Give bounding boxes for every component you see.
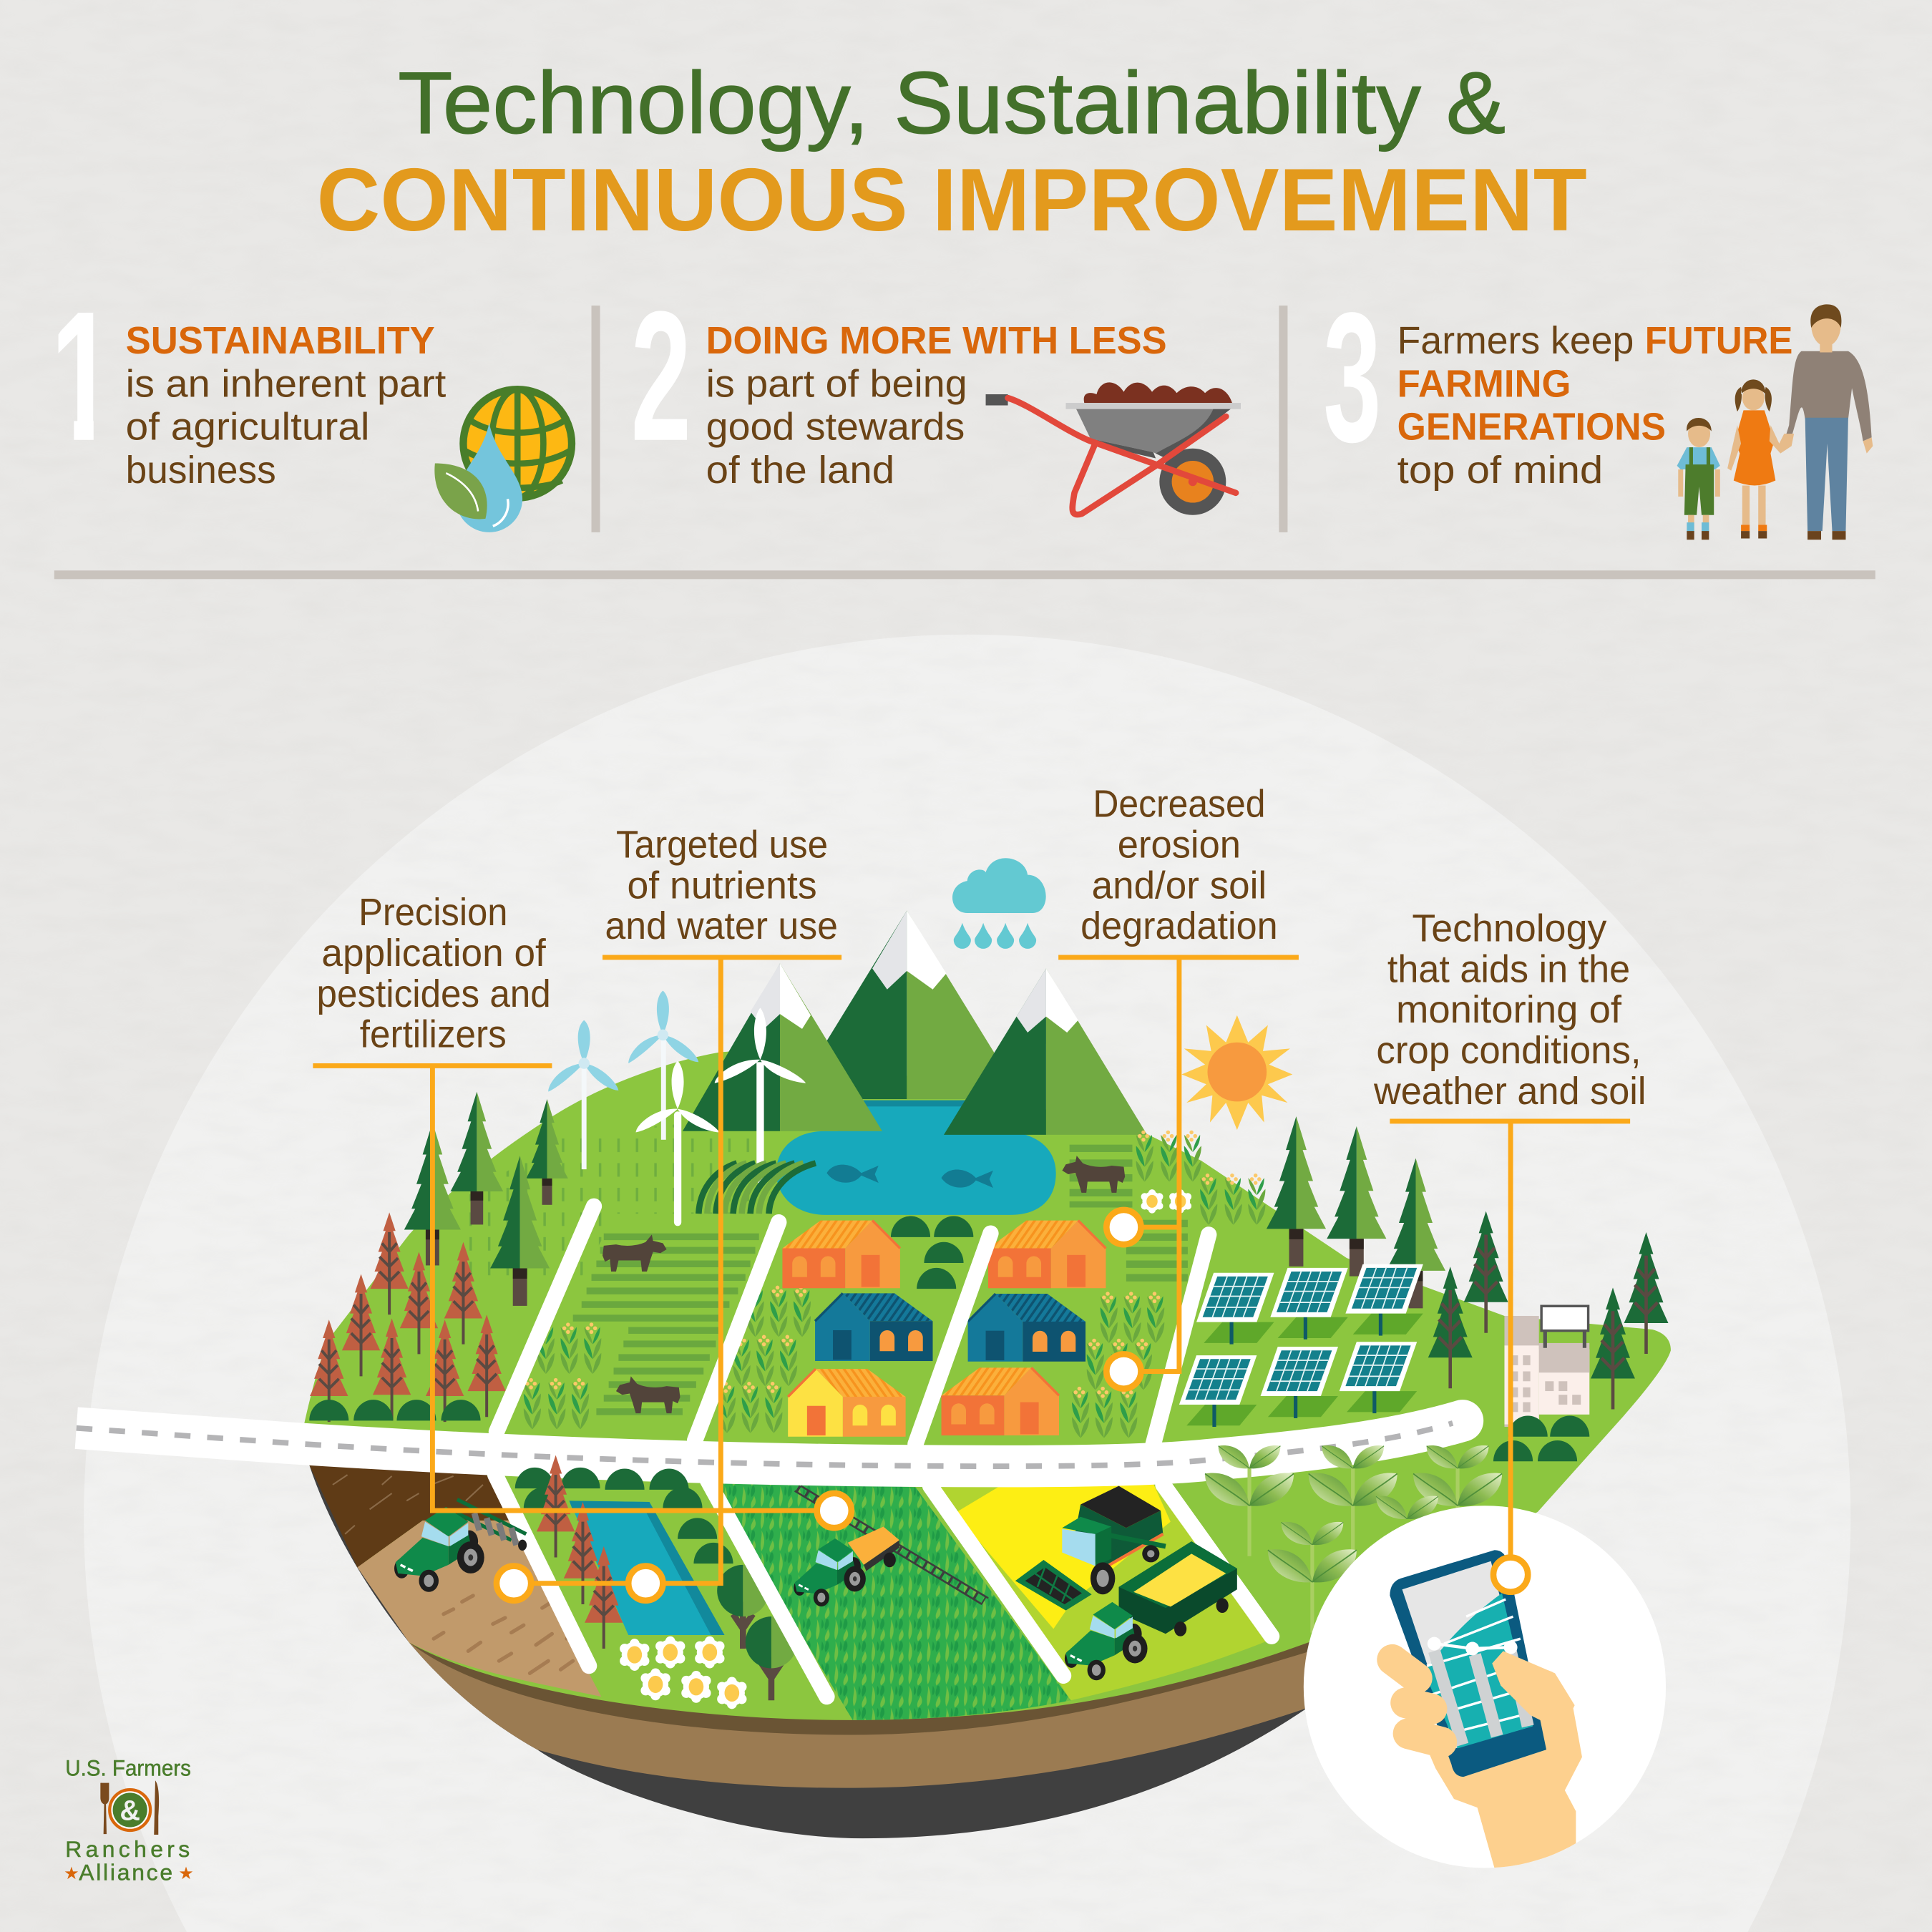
white detail circle [1304, 1506, 1666, 1868]
callout: targeted use [497, 824, 841, 1601]
tilled soil [357, 1521, 601, 1697]
callout: technology [1373, 908, 1646, 1592]
logo: U.S. Farmers & Ranchers Alliance: Alliance [79, 1860, 172, 1885]
sprayer tractor [794, 1486, 988, 1606]
fork [101, 1783, 109, 1833]
small flowers top [1141, 1189, 1191, 1214]
callout: precision application [313, 892, 852, 1528]
leader line [530, 957, 841, 1584]
main road [77, 1400, 1483, 1466]
left mountain [683, 964, 882, 1131]
green land [304, 1048, 1671, 1720]
label: Precision [358, 892, 507, 934]
bushes lower [515, 1468, 733, 1563]
label: Technology [1412, 908, 1607, 950]
logo: U.S. Farmers & Ranchers Alliance [64, 1755, 194, 1885]
text: sustainability: SUSTAINABILITY [126, 320, 435, 362]
label [1080, 784, 1278, 947]
text: sustainability: business [126, 449, 276, 492]
stars: ★ [178, 1864, 194, 1883]
label: and/or soil [1092, 864, 1267, 907]
soil marks [333, 1475, 483, 1534]
text: doing more with less: good stewards [706, 406, 965, 449]
label: Decreased [1093, 784, 1265, 826]
phone screen [1402, 1561, 1533, 1748]
section rule [54, 570, 1875, 579]
label: fertilizers [360, 1014, 507, 1056]
road centre dashes [77, 1423, 1453, 1466]
solar panels [1179, 1264, 1423, 1427]
round trees [717, 1565, 797, 1700]
label: pesticides and [317, 973, 551, 1015]
striped crop field [573, 1145, 1188, 1415]
father [1784, 304, 1873, 540]
chart area [1425, 1593, 1533, 1748]
fingers [1392, 1659, 1442, 1742]
label: degradation [1080, 905, 1278, 947]
icon: wheelbarrow [986, 382, 1241, 515]
label: weather and soil [1373, 1070, 1646, 1113]
text: future farming generations: Farmers keep [1397, 320, 1634, 362]
logo: U.S. Farmers & Ranchers Alliance: Ranchers [65, 1836, 190, 1862]
text: doing more with less: DOING MORE WITH LESS [706, 320, 1167, 362]
daughter [1727, 379, 1794, 538]
red trees [310, 1212, 506, 1422]
lake with fish [776, 1101, 1056, 1215]
marker [1493, 1558, 1528, 1592]
label: crop conditions, [1376, 1030, 1641, 1072]
text: sustainability [126, 320, 447, 492]
marker [817, 1493, 852, 1528]
title line 1: Technology, Sustainability & [398, 54, 1506, 152]
fish [826, 1165, 993, 1188]
label: Targeted use [616, 824, 828, 866]
text: doing more with less: is part of being [706, 363, 967, 405]
panel: sustainability [59, 313, 575, 532]
text: future farming generations: top of mind [1397, 449, 1603, 492]
pine trees right [1267, 1116, 1445, 1308]
label: monitoring of [1396, 989, 1621, 1031]
leader line [1390, 1121, 1630, 1558]
stars: ★ [64, 1864, 79, 1883]
seedlings [1205, 1445, 1502, 1633]
label: erosion [1118, 824, 1241, 866]
divider 1 [592, 306, 600, 532]
label [317, 892, 551, 1056]
text: doing more with less [706, 320, 1167, 492]
panel: doing more with less [631, 273, 1241, 515]
large pale circle behind the island [84, 635, 1850, 1932]
number 1: 1 [51, 273, 114, 479]
chart data points [1428, 1637, 1518, 1655]
divider 2 [1279, 306, 1287, 532]
label [605, 824, 838, 947]
number 2: 2 [631, 273, 691, 479]
dark unplowed soil [309, 1465, 509, 1567]
farm island illustration [77, 858, 1671, 1873]
hillside ticks [459, 1115, 764, 1282]
soil layer [409, 1602, 1318, 1788]
leader line [1058, 957, 1299, 1372]
text: doing more with less: of the land [706, 449, 894, 492]
daisies [620, 1636, 746, 1709]
text: future farming generations: FARMING [1397, 363, 1571, 405]
marker water [628, 1566, 663, 1601]
pond [570, 1501, 724, 1635]
diagonal farm lanes [495, 1206, 1272, 1697]
title line 2: CONTINUOUS IMPROVEMENT [317, 151, 1587, 250]
title [317, 54, 1587, 250]
marker upper [1106, 1210, 1141, 1244]
sun [1181, 1015, 1292, 1130]
wind turbines [548, 990, 806, 1226]
knife [154, 1780, 159, 1835]
phone body [1390, 1550, 1546, 1777]
reeds [698, 1163, 816, 1214]
label: application of [321, 932, 546, 975]
plow tractor [394, 1500, 527, 1592]
callout: decreased erosion [1058, 784, 1299, 1389]
wheat and lime field [934, 1483, 1267, 1700]
text: future farming generations: GENERATIONS [1397, 406, 1666, 449]
label: that aids in the [1387, 948, 1630, 990]
bushes upper left [309, 1400, 481, 1420]
label: of nutrients [627, 864, 817, 907]
icon: globe with water drop and leaf [434, 389, 572, 532]
text: sustainability: of agricultural [126, 406, 370, 449]
grain trailer [1119, 1541, 1237, 1636]
building and billboard [1504, 1306, 1589, 1427]
right mountain [944, 968, 1147, 1135]
label [1373, 908, 1646, 1113]
corn rows [524, 1131, 1265, 1438]
dark trees right [1428, 1211, 1668, 1410]
label: and water use [605, 905, 838, 947]
grain tractor [1065, 1602, 1148, 1680]
plate [109, 1790, 150, 1830]
chart bars [1434, 1651, 1528, 1745]
houses [782, 1221, 1106, 1437]
son [1677, 418, 1720, 540]
soil field [309, 1465, 601, 1697]
number 3: 3 [1323, 273, 1381, 480]
cows [602, 1156, 1125, 1413]
topsoil band [409, 1626, 1318, 1735]
grass field [708, 1478, 1070, 1720]
text: sustainability: is an inherent part [126, 363, 447, 405]
text: future farming generations [1397, 320, 1792, 492]
chart lines [1427, 1599, 1531, 1735]
leader line [313, 1065, 818, 1511]
plate: & [119, 1795, 140, 1826]
combine harvester [1015, 1486, 1166, 1611]
hand holding phone [1390, 1550, 1582, 1873]
thumb [1492, 1651, 1575, 1731]
stars [64, 1864, 194, 1883]
red trees lower [537, 1455, 623, 1649]
bushes by lake [891, 1216, 973, 1289]
text: future farming generations: FUTURE [1645, 320, 1792, 362]
panel: future farming generations [1323, 273, 1873, 540]
marker soil [497, 1566, 531, 1601]
back mountain [791, 911, 1023, 1099]
bushes right [1493, 1416, 1589, 1461]
pine trees left [404, 1092, 568, 1306]
bedrock layer [309, 1454, 1318, 1838]
marker lower [1106, 1354, 1141, 1389]
logo: U.S. Farmers & Ranchers Alliance: U.S. Farmers [65, 1755, 191, 1780]
rain cloud [952, 858, 1046, 949]
palm [1430, 1669, 1582, 1868]
icon: family [1677, 304, 1873, 540]
